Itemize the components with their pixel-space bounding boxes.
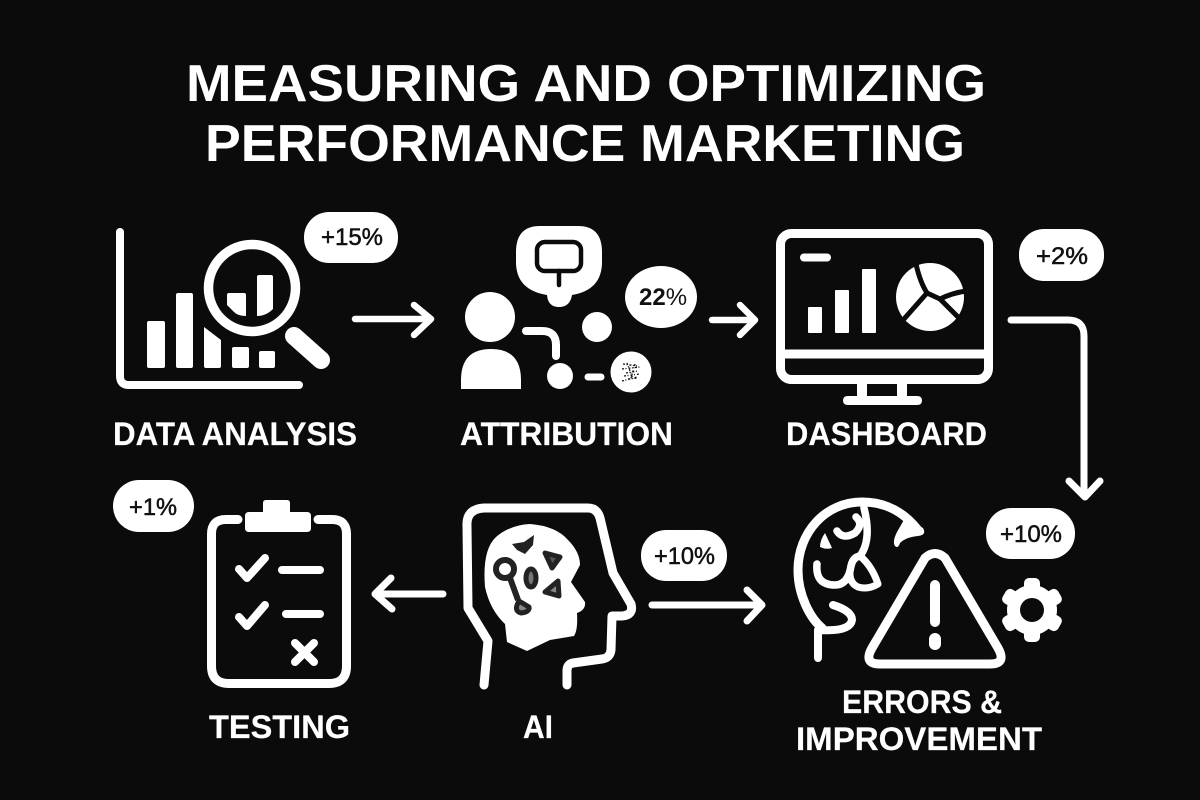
- badge: 22%: [625, 266, 697, 328]
- arrow: AI to errors: [652, 590, 762, 621]
- arrow: AI to testing: [375, 578, 443, 609]
- icon: chart with magnifier: [120, 232, 321, 385]
- title: MEASURING AND OPTIMIZING: [186, 55, 986, 113]
- panel: testing: [113, 480, 350, 745]
- badge: +2%: [1019, 229, 1104, 281]
- badge: +10%: [986, 508, 1075, 559]
- label: attribution: ATTRIBUTION: [460, 416, 673, 452]
- icon: globe, warning and gear: [798, 502, 1064, 664]
- badge: +10%: +10%: [654, 543, 715, 570]
- badge: +10%: [641, 530, 727, 581]
- label: errors and improvement: IMPROVEMENT: [796, 721, 1042, 757]
- badge: +15%: +15%: [321, 224, 383, 251]
- panel: data analysis: [113, 212, 398, 452]
- badge: +1%: +1%: [129, 494, 177, 521]
- label: errors and improvement: ERRORS &: [842, 684, 1002, 720]
- label: errors and improvement: [796, 684, 1042, 757]
- panel: dashboard: [778, 229, 1104, 452]
- icon: monitor with charts: [778, 234, 990, 405]
- badge: +10%: +10%: [1000, 521, 1062, 548]
- panel: attribution: [460, 226, 697, 452]
- icon: clipboard checklist: [212, 500, 346, 684]
- badge: +1%: [113, 480, 194, 532]
- panel: AI: [467, 508, 727, 745]
- arrow: dashboard to errors: [1011, 320, 1100, 497]
- title: [186, 55, 986, 173]
- icon: person and attribution paths: [461, 226, 652, 392]
- arrow: data analysis to attribution: [355, 305, 431, 335]
- title: PERFORMANCE MARKETING: [205, 115, 965, 173]
- label: testing: TESTING: [209, 709, 350, 745]
- icon: head with brain: [467, 508, 632, 685]
- badge: +2%: +2%: [1036, 243, 1088, 270]
- badge: 22%: 22%: [639, 284, 687, 311]
- label: data analysis: DATA ANALYSIS: [113, 416, 357, 452]
- badge: +15%: [304, 212, 398, 263]
- label: AI: AI: [523, 709, 553, 745]
- panel: errors and improvement: [796, 502, 1075, 757]
- label: dashboard: DASHBOARD: [786, 416, 987, 452]
- arrow: attribution to dashboard: [712, 305, 755, 335]
